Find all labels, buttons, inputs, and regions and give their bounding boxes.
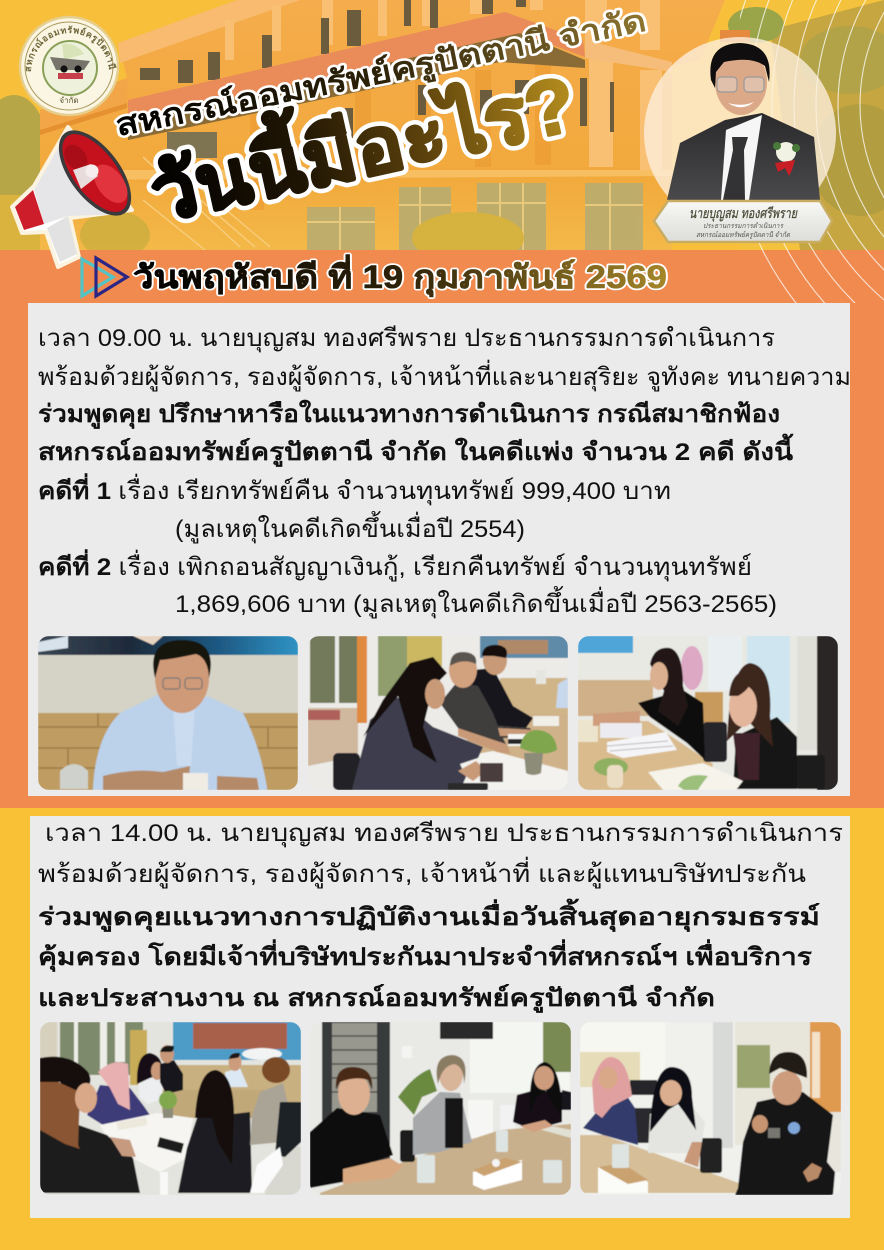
plate position: ประธานกรรมการดำเนินการ bbox=[703, 222, 784, 230]
woman in white shirt bbox=[700, 1138, 722, 1173]
morning text: เวลา 09.00 น. นายบุญสม ทองศรีพราย ประธานกรรมการดำเนินการ bbox=[38, 325, 775, 353]
morning text: สหกรณ์ออมทรัพย์ครูปัตตานี จำกัด ในคดีแพ่ง จำนวน 2 คดี ดังนี้ bbox=[38, 433, 794, 467]
morning text: คดีที่ 1 เรื่อง เรียกทรัพย์คืน จำนวนทุนทรัพย์ 999,400 บาท bbox=[38, 473, 671, 506]
icon: play arrows bbox=[82, 258, 127, 296]
woman in grey blazer bbox=[413, 1092, 472, 1155]
woman back view bbox=[178, 1112, 252, 1193]
afternoon text: และประสานงาน ณ สหกรณ์ออมทรัพย์ครูปัตตานี จำกัด bbox=[38, 984, 715, 1013]
photo: three women at table bbox=[310, 1022, 571, 1195]
tissue box bbox=[598, 1163, 648, 1193]
woman on right bbox=[513, 1090, 562, 1130]
woman in hijab bbox=[582, 1097, 638, 1146]
date heading: วันพฤหัสบดี ที่ 19 กุมภาพันธ์ 2569 bbox=[133, 254, 667, 298]
morning text: พร้อมด้วยผู้จัดการ, รองผู้จัดการ, เจ้าหน้าที่และนายสุริยะ จูทังคะ ทนายความ bbox=[38, 359, 851, 392]
woman in grey blazer bbox=[250, 1083, 290, 1145]
photo: insurance representatives bbox=[580, 1022, 841, 1195]
title: cooperative name: สหกรณ์ออมทรัพย์ครูปัตตานี จำกัด bbox=[113, 3, 649, 145]
lower-left ledge bbox=[120, 80, 121, 81]
panel: morning session bbox=[28, 303, 851, 796]
morning text: (มูลเหตุในคดีเกิดขึ้นเมื่อปี 2554) bbox=[175, 511, 525, 544]
logo: cooperative seal bbox=[18, 16, 120, 116]
morning text: คดีที่ 2 เรื่อง เพิกถอนสัญญาเงินกู้, เรียกคืนทรัพย์ จำนวนทุนทรัพย์ bbox=[38, 549, 752, 582]
header banner: building photo bbox=[0, 0, 884, 264]
afternoon text: คุ้มครอง โดยมีเจ้าที่บริษัทประกันมาประจำที่สหกรณ์ฯ เพื่อบริการ bbox=[38, 939, 813, 973]
title: what's on today: วันนี้มีอะไร? bbox=[140, 46, 583, 239]
afternoon text: ร่วมพูดคุยแนวทางการปฏิบัติงานเมื่อวันสิ้นสุดอายุกรมธรรม์ bbox=[38, 898, 820, 933]
portrait: chairman bbox=[644, 37, 836, 229]
morning text: 1,869,606 บาท (มูลเหตุในคดีเกิดขึ้นเมื่อปี 2563-2565) bbox=[175, 586, 777, 619]
date heading: วันพฤหัสบดี ที่ 19 กุมภาพันธ์ 2569 bbox=[133, 254, 667, 298]
afternoon text: พร้อมด้วยผู้จัดการ, รองผู้จัดการ, เจ้าหน้าที่ และผู้แทนบริษัทประกัน bbox=[38, 856, 806, 889]
morning text: ร่วมพูดคุย ปรึกษาหารือในแนวทางการดำเนินการ กรณีสมาชิกฟ้อง bbox=[38, 399, 780, 430]
young man bbox=[468, 668, 533, 732]
photo: chairman at table bbox=[38, 636, 298, 790]
white table bbox=[100, 1113, 193, 1172]
logo bottom text: จำกัด bbox=[59, 96, 79, 105]
decorative arcs bbox=[740, 0, 884, 303]
plate organisation: สหกรณ์ออมทรัพย์ครูปัตตานี จำกัด bbox=[696, 230, 790, 239]
afternoon text: เวลา 14.00 น. นายบุญสม ทองศรีพราย ประธานกรรมการดำเนินการ bbox=[45, 820, 843, 848]
afternoon text bbox=[38, 820, 843, 1013]
woman in black bbox=[310, 1108, 393, 1188]
photo: group around table bbox=[40, 1022, 301, 1195]
morning text bbox=[38, 325, 851, 619]
plate name: นายบุญสม ทองศรีพราย bbox=[689, 205, 798, 222]
logo ring text: สหกรณ์ออมทรัพย์ครูปัตตานี bbox=[26, 26, 117, 72]
photo: staff reviewing documents bbox=[578, 636, 838, 790]
title: what's on today: วันนี้มีอะไร? bbox=[140, 46, 583, 239]
orange section background bbox=[0, 250, 884, 808]
people in the background bbox=[138, 1078, 163, 1104]
icon: megaphone bbox=[12, 118, 145, 267]
photo: lawyer meeting bbox=[308, 636, 568, 790]
woman with pen bbox=[352, 697, 483, 790]
awning bbox=[128, 12, 585, 122]
older man bbox=[441, 684, 532, 745]
glasses and tissue box bbox=[417, 1155, 435, 1183]
panel: afternoon session bbox=[30, 816, 850, 1218]
man in black jacket bbox=[735, 1092, 835, 1195]
woman in foreground left bbox=[40, 1122, 140, 1193]
name plate bbox=[654, 201, 832, 242]
